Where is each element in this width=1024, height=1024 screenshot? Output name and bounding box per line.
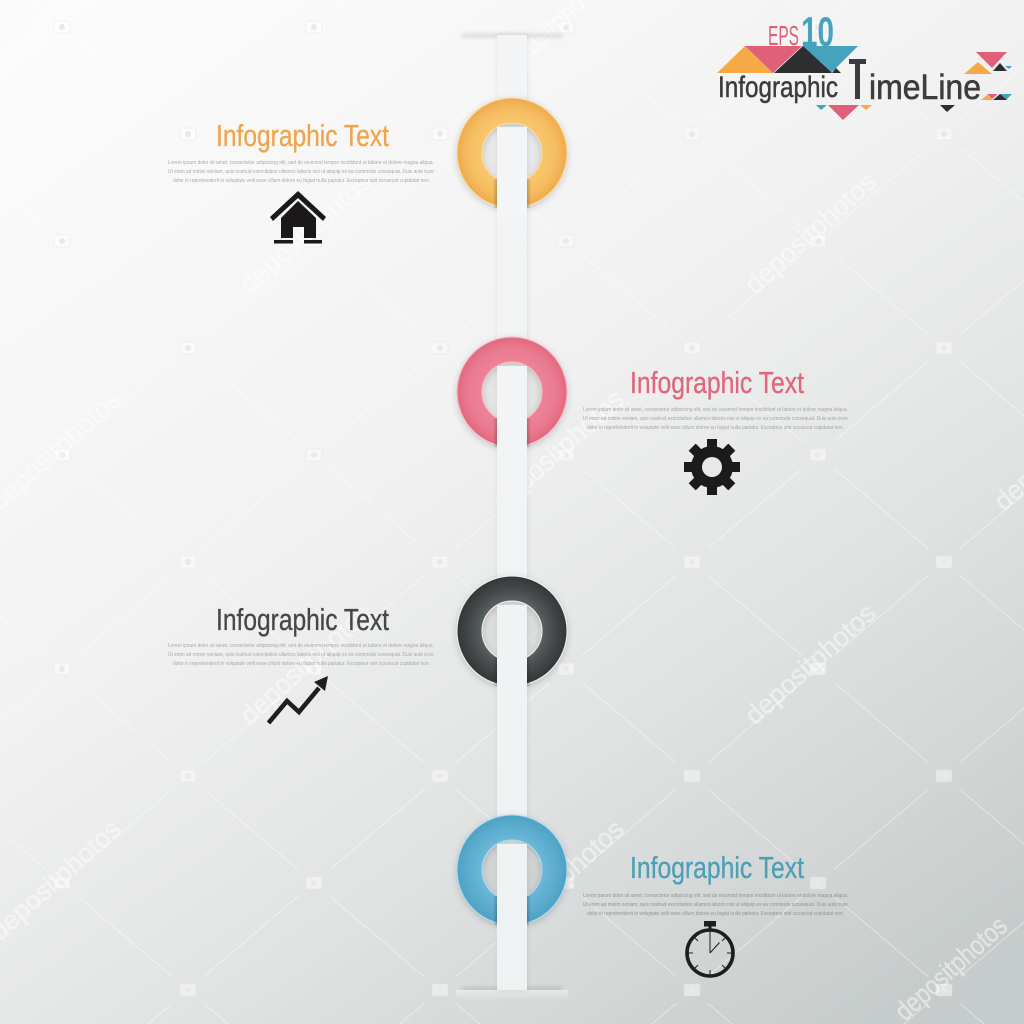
step 2 body text <box>583 407 848 431</box>
logo: word Infographic: Infographic <box>718 71 838 104</box>
step 3 body text: Ut enim ad minim veniam, quis nostrud exercitation ullamco laboris nisi ut aliquip ex ea commodo consequat. Duis aute irure <box>168 652 434 658</box>
ring 3: dark <box>457 576 567 686</box>
step 3 heading: Infographic Text <box>216 602 389 637</box>
step 1 body text: Lorem ipsum dolor sit amet, consectetur adipiscing elit, sed do eiusmod tempor incididunt ut labore et dolore magna aliqua. <box>168 160 434 166</box>
watermark text: depositphotos <box>739 167 882 299</box>
logo: number 10: 10 <box>801 8 834 55</box>
icon: house <box>270 191 326 244</box>
watermark text: depositphotos <box>234 598 377 730</box>
step 4 body text: Lorem ipsum dolor sit amet, consectetur adipiscing elit, sed do eiusmod tempor incididunt ut labore et dolore magna aliqua. <box>583 893 848 899</box>
logo: word imeLine: imeLine <box>869 68 981 107</box>
strip over ring 4 <box>493 844 531 990</box>
ring 1: orange <box>457 98 567 208</box>
step 3 body text <box>168 643 434 667</box>
timeline strip <box>497 35 527 990</box>
strip over ring 3 <box>493 605 531 702</box>
step 4 body text: Ut enim ad minim veniam, quis nostrud exercitation ullamco laboris nisi ut aliquip ex ea commodo consequat. Duis aute irure <box>583 902 848 908</box>
step 2 body text: Ut enim ad minim veniam, quis nostrud exercitation ullamco laboris nisi ut aliquip ex ea commodo consequat. Duis aute irure <box>583 416 848 422</box>
timeline strip slot: bottom <box>456 988 568 1000</box>
ring 2: pink <box>457 337 567 447</box>
step 4 body text: dolor in reprehenderit in voluptate velit esse cillum dolore eu fugiat nulla pariatur. Excepteur sint occaecat cupidatat non. <box>587 911 844 917</box>
logo: EPS label: EPS <box>768 20 799 51</box>
step 1 body text <box>168 160 434 184</box>
step 2 body text: dolor in reprehenderit in voluptate velit esse cillum dolore eu fugiat nulla pariatur. Excepteur sint occaecat cupidatat non. <box>587 425 844 431</box>
step 1 body text: dolor in reprehenderit in voluptate velit esse cillum dolore eu fugiat nulla pariatur. Excepteur sint occaecat cupidatat non. <box>173 178 430 184</box>
strip over ring 2 <box>493 366 531 457</box>
step 4 body text <box>583 893 848 917</box>
step 2 heading: Infographic Text <box>630 365 804 400</box>
logo: triangle banner <box>717 46 858 73</box>
logo: Infographic TimeLine <box>717 8 1012 120</box>
icon: rising arrow <box>268 676 328 723</box>
step 1 body text: Ut enim ad minim veniam, quis nostrud exercitation ullamco laboris nisi ut aliquip ex ea commodo consequat. Duis aute irure <box>168 169 434 175</box>
watermark text: depositphotos <box>487 384 630 516</box>
logo: accent triangles <box>816 52 1012 120</box>
icon: stopwatch <box>687 922 733 976</box>
logo: large T <box>849 59 866 99</box>
ring 4: blue <box>457 815 567 925</box>
step 4 heading: Infographic Text <box>630 850 804 885</box>
watermark text: depositphotos <box>487 814 630 946</box>
step 3 body text: dolor in reprehenderit in voluptate velit esse cillum dolore eu fugiat nulla pariatur. Excepteur sint occaecat cupidatat non. <box>173 661 430 667</box>
step 3 body text: Lorem ipsum dolor sit amet, consectetur adipiscing elit, sed do eiusmod tempor incididunt ut labore et dolore magna aliqua. <box>168 643 434 649</box>
watermark text: depositphotos <box>234 167 377 299</box>
step 2 body text: Lorem ipsum dolor sit amet, consectetur adipiscing elit, sed do eiusmod tempor incididunt ut labore et dolore magna aliqua. <box>583 407 848 413</box>
timeline strip slot: top <box>462 34 562 37</box>
step 1 heading: Infographic Text <box>216 118 389 153</box>
icon: gear <box>684 439 740 495</box>
strip over ring 1 <box>493 127 531 218</box>
watermark text: depositphotos <box>739 598 882 730</box>
